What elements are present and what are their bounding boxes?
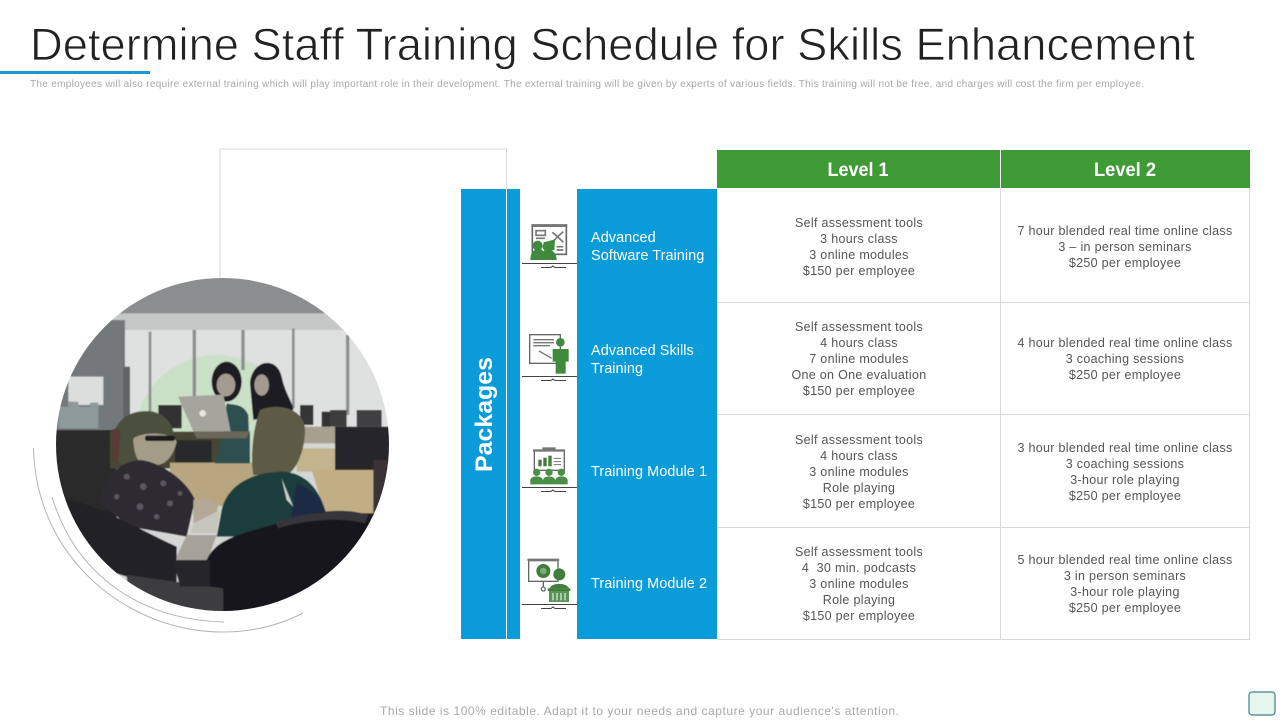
level 1 cells <box>791 216 927 623</box>
level 1 cells: 3 online modules <box>809 465 909 479</box>
level 1 cells: 4 hours class <box>820 449 898 463</box>
level 1 cells: Self assessment tools <box>795 320 923 334</box>
training names column: Advanced <box>591 230 656 246</box>
level 1 cells: Role playing <box>823 481 895 495</box>
level 2 cells: $250 per employee <box>1069 489 1181 503</box>
packages vertical bar <box>461 189 520 639</box>
level 2 cells: 3-hour role playing <box>1070 473 1180 487</box>
level 1 cells: $150 per employee <box>803 609 915 623</box>
level 2 cells: 3 coaching sessions <box>1066 352 1184 366</box>
level 2 cells: 3 coaching sessions <box>1066 457 1184 471</box>
level 2 cells: 3 – in person seminars <box>1058 240 1192 254</box>
training names column: Advanced Skills <box>591 343 694 359</box>
level 2 cells: 5 hour blended real time online class <box>1017 553 1233 567</box>
level 1 cells: Self assessment tools <box>795 433 923 447</box>
icon: software training <box>530 224 567 260</box>
icon: skills training <box>530 335 569 374</box>
level 2 cells: 3-hour role playing <box>1070 585 1180 599</box>
level 2 cells: 3 hour blended real time online class <box>1017 441 1233 455</box>
training names column: Training Module 2 <box>591 576 707 592</box>
level 1 cells: 4 30 min. podcasts <box>802 561 916 575</box>
level 2 cells: 7 hour blended real time online class <box>1017 224 1233 238</box>
decorative arcs beside photo <box>34 448 303 632</box>
table header <box>717 150 1250 188</box>
level 1 cells: 3 online modules <box>809 248 909 262</box>
icon: training module 1 <box>530 447 568 484</box>
level 1 cells: $150 per employee <box>803 264 915 278</box>
table header: Level 2 <box>1094 160 1156 181</box>
circular office photo <box>50 270 397 620</box>
level 1 cells: 7 online modules <box>809 352 909 366</box>
subtitle: The employees will also require external training which will play important role in their development. The external training will be given by experts of various fields. This training will not be free, and charges will cost the firm per employee. <box>30 79 1144 90</box>
level 2 cells: $250 per employee <box>1069 601 1181 615</box>
corner button <box>1249 692 1275 715</box>
title: Determine Staff Training Schedule for Skills Enhancement <box>30 19 1195 70</box>
table foreground <box>176 534 217 561</box>
table header: Level 1 <box>828 160 889 181</box>
laptop <box>178 395 231 431</box>
level 1 cells: Self assessment tools <box>795 545 923 559</box>
woman with glasses <box>115 410 174 464</box>
packages label: Packages <box>471 357 498 472</box>
level 1 cells: Self assessment tools <box>795 216 923 230</box>
icon base lines <box>522 264 577 608</box>
monitors right <box>300 405 313 425</box>
footer note: This slide is 100% editable. Adapt it to your needs and capture your audience's attention. <box>380 704 899 718</box>
chairs <box>66 501 178 583</box>
training names column: Software Training <box>591 248 704 264</box>
training names column: Training <box>591 361 643 377</box>
title accent underline <box>0 71 150 74</box>
level 1 cells: 3 hours class <box>820 232 898 246</box>
level 2 cells: $250 per employee <box>1069 368 1181 382</box>
cubicle panels <box>170 463 257 510</box>
level 2 cells: 3 in person seminars <box>1064 569 1186 583</box>
level 2 cells: 4 hour blended real time online class <box>1017 336 1233 350</box>
woman with back turned <box>252 407 305 475</box>
level 1 cells: 3 online modules <box>809 577 909 591</box>
level 2 cells <box>1017 224 1233 615</box>
training names column: Training Module 1 <box>591 464 707 480</box>
level 1 cells: $150 per employee <box>803 497 915 511</box>
level 1 cells: 4 hours class <box>820 336 898 350</box>
level 1 cells: $150 per employee <box>803 384 915 398</box>
icon: training module 2 <box>527 559 570 602</box>
level 2 cells: $250 per employee <box>1069 256 1181 270</box>
level 1 cells: One on One evaluation <box>791 368 927 382</box>
level 1 cells: Role playing <box>823 593 895 607</box>
standing women <box>215 403 250 463</box>
photo frame line <box>220 149 506 278</box>
table grid <box>718 188 1250 640</box>
training names column <box>577 189 717 639</box>
